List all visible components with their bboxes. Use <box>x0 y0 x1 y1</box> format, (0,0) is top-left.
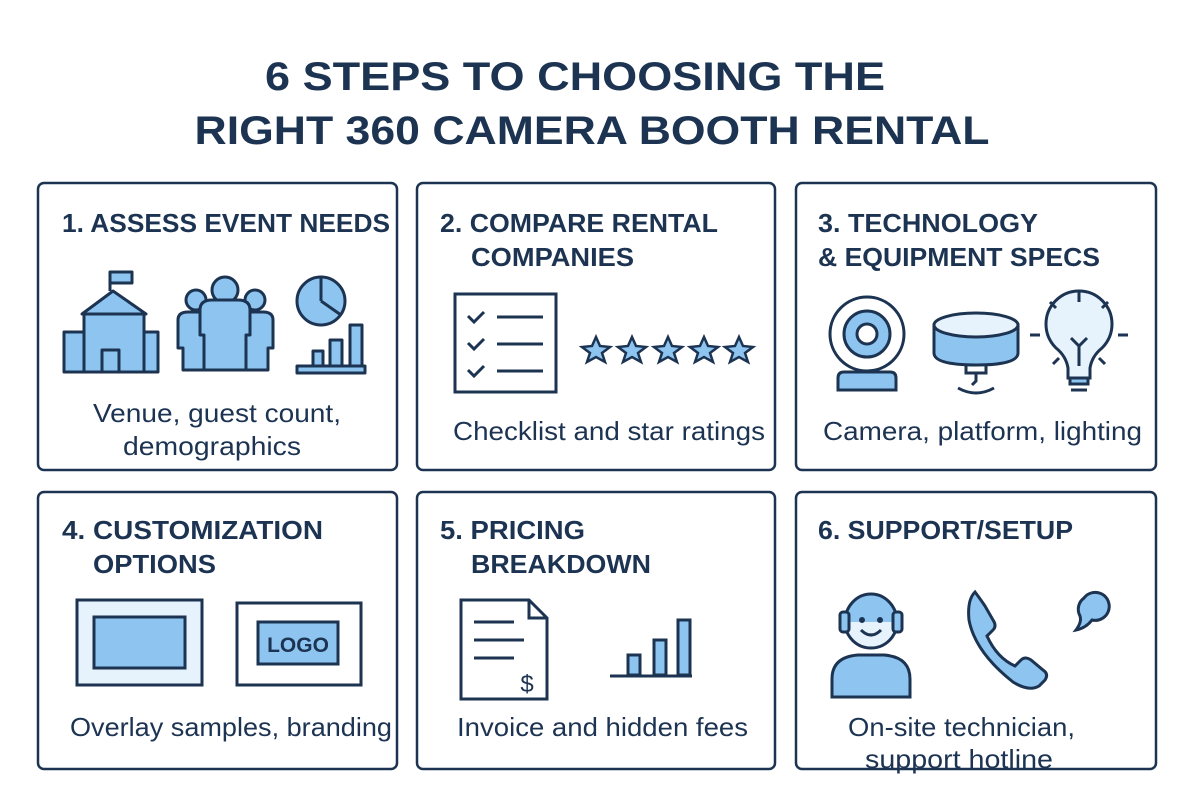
heading 6: 6. SUPPORT/SETUP <box>818 515 1073 545</box>
icon: overlay frame <box>77 600 202 685</box>
icon: bar chart <box>610 620 692 676</box>
icon: bulb <box>1030 291 1128 390</box>
icon: logo frame <box>237 603 361 685</box>
icon: platform <box>934 313 1018 393</box>
heading 4: 4. CUSTOMIZATION <box>62 515 323 545</box>
panel 5 content <box>440 515 748 742</box>
panel 2 content <box>440 208 765 446</box>
title: 6 STEPS TO CHOOSING THE <box>265 55 885 99</box>
icon: chart <box>297 277 365 373</box>
icon: phone <box>969 592 1109 688</box>
caption 5: Invoice and hidden fees <box>457 712 748 742</box>
panel: customization options <box>38 492 397 769</box>
panel: pricing breakdown <box>417 492 775 769</box>
panel 3 content: & EQUIPMENT SPECS <box>818 242 1100 272</box>
panel: assess event needs <box>38 183 397 470</box>
title: RIGHT 360 CAMERA BOOTH RENTAL <box>194 109 990 153</box>
panel 6 content: support hotline <box>865 744 1053 774</box>
icon: logo frame: LOGO <box>267 634 329 657</box>
caption 3: Camera, platform, lighting <box>823 416 1142 446</box>
heading 3: 3. TECHNOLOGY <box>818 208 1038 238</box>
icon: checklist <box>455 294 556 392</box>
caption 6: On-site technician, <box>848 712 1075 742</box>
icon: invoice: $ <box>520 671 534 698</box>
panel 6 content <box>818 515 1109 774</box>
panel 5 content: BREAKDOWN <box>471 549 651 579</box>
panel 1 content: demographics <box>123 431 301 461</box>
icon: people <box>178 277 273 370</box>
icon: technician <box>832 594 910 697</box>
caption 1: Venue, guest count, <box>93 398 341 428</box>
panel: support/setup <box>796 492 1156 769</box>
heading 1: 1. ASSESS EVENT NEEDS <box>62 208 390 238</box>
panel 3 content <box>818 208 1142 446</box>
caption 2: Checklist and star ratings <box>453 416 765 446</box>
panel 2 content: COMPANIES <box>471 242 634 272</box>
panel 1 content <box>62 208 390 461</box>
icon: invoice <box>461 600 547 699</box>
icon: building <box>64 272 158 372</box>
panel: technology & equipment specs <box>796 183 1156 470</box>
heading 5: 5. PRICING <box>440 515 585 545</box>
caption 4: Overlay samples, branding <box>70 712 392 742</box>
panel 4 content: OPTIONS <box>93 549 216 579</box>
title <box>194 55 990 153</box>
panel: compare rental companies <box>417 183 775 470</box>
panel 4 content <box>62 515 392 742</box>
heading 2: 2. COMPARE RENTAL <box>440 208 718 238</box>
icon: camera <box>830 297 904 390</box>
icon: stars <box>582 337 753 362</box>
